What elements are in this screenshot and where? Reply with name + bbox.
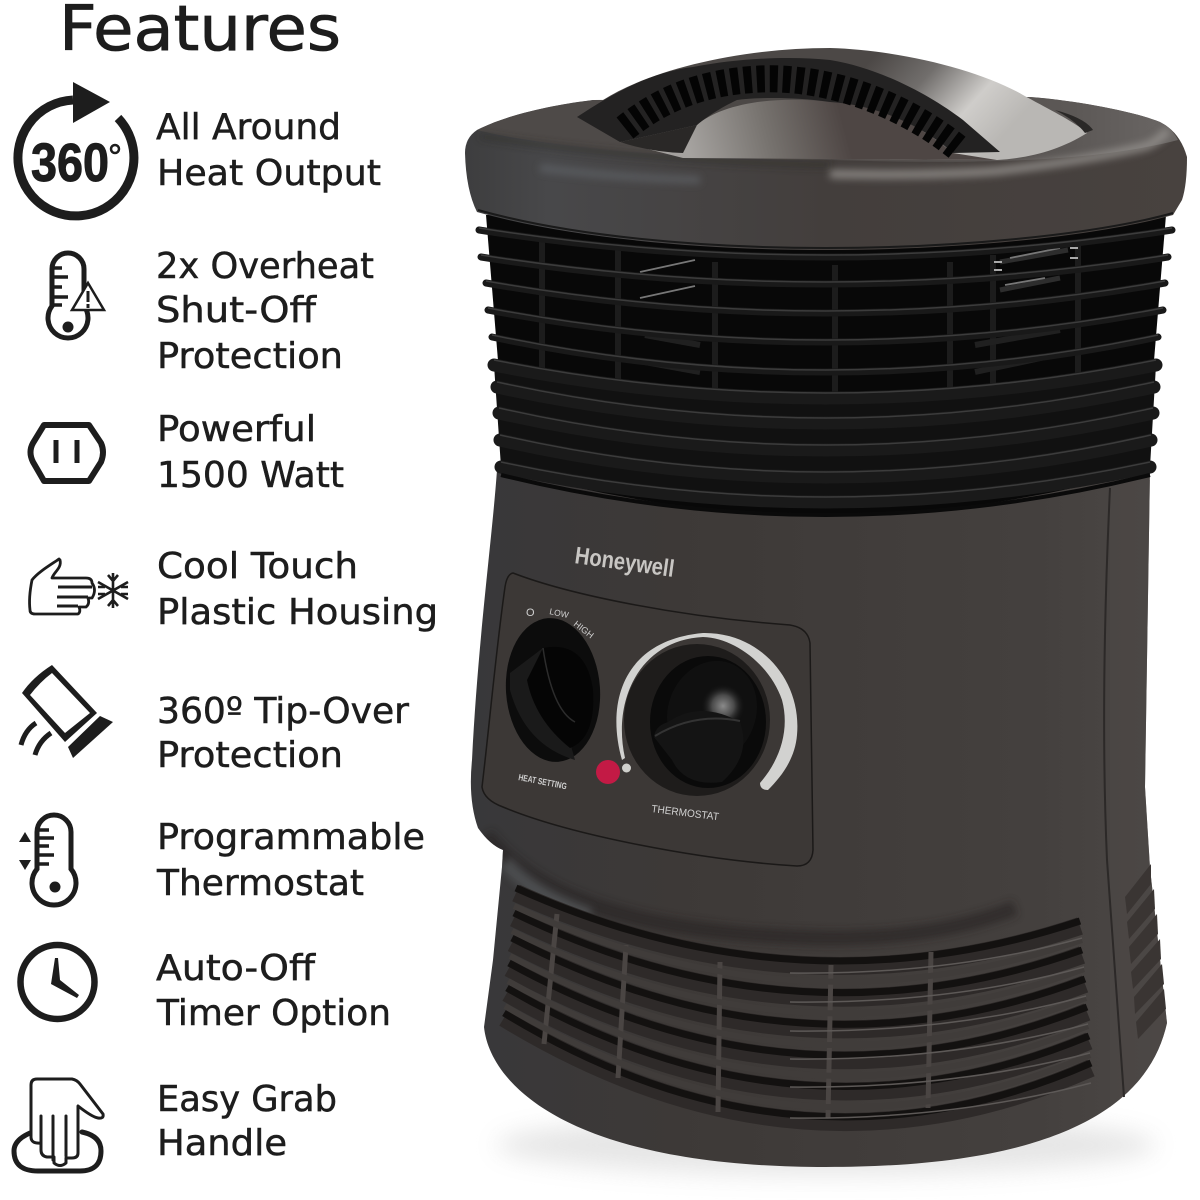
feature: overheat protection: Protection: [157, 336, 343, 377]
feature: cool touch housing: Plastic Housing: [157, 592, 438, 633]
thermostat knob: [653, 648, 771, 783]
feature: programmable thermostat: [156, 817, 425, 904]
feature: overheat protection: Shut-Off: [156, 290, 317, 331]
feature: auto-off timer: Timer Option: [156, 993, 391, 1034]
feature: tip-over protection: [157, 691, 409, 776]
icon: programmable thermometer: [19, 815, 76, 905]
thermostat scale arc: [616, 633, 797, 790]
side vents: [1125, 864, 1166, 1039]
icon: hand on grab handle: [14, 1079, 103, 1171]
feature: programmable thermostat: Thermostat: [156, 863, 364, 904]
control panel: [482, 573, 813, 866]
icon: clock: [20, 945, 94, 1019]
feature: easy grab handle: Easy Grab: [157, 1079, 337, 1120]
heat setting labels: [518, 606, 596, 791]
heat setting labels: LOW: [549, 606, 570, 620]
heat setting labels: HEAT SETTING: [518, 772, 568, 791]
brand logo: Honeywell: [573, 542, 676, 583]
body seam: [1104, 488, 1124, 1097]
feature: cool touch housing: Cool Touch: [157, 546, 358, 587]
heat setting labels: HIGH: [572, 619, 596, 640]
feature: cool touch housing: [157, 546, 438, 633]
carry handle: [577, 58, 1000, 153]
feature: 1500 watt: [157, 409, 344, 496]
heater body and base: [460, 460, 1180, 1180]
feature: easy grab handle: Handle: [157, 1123, 287, 1164]
floor shadow: [496, 1115, 1156, 1175]
feature: programmable thermostat: Programmable: [157, 817, 425, 858]
thermostat well: [624, 644, 770, 796]
feature: overheat protection: 2x Overheat: [156, 246, 374, 287]
feature: auto-off timer: Auto-Off: [156, 948, 316, 989]
heater illustration: [460, 48, 1200, 1180]
dome: [603, 48, 1093, 160]
indicator light: [596, 760, 620, 784]
heat setting labels: O: [526, 607, 535, 619]
icon: tip-over heater: [21, 665, 113, 758]
feature: 1500 watt: Powerful: [157, 409, 316, 450]
feature: auto-off timer: [156, 948, 391, 1034]
thermostat label: THERMOSTAT: [651, 803, 720, 823]
icon: thermometer with warning: [48, 253, 104, 338]
feature: all around heat output: Heat Output: [157, 153, 381, 194]
icon: cool touch hand: [30, 559, 128, 614]
feature: all around heat output: [156, 107, 381, 194]
feature: tip-over protection: Protection: [157, 735, 343, 776]
feature: 1500 watt: 1500 Watt: [157, 455, 344, 496]
heat setting knob: [501, 615, 605, 765]
top rim: [465, 97, 1187, 250]
feature: overheat protection: [156, 246, 374, 377]
feature: tip-over protection: 360º Tip-Over: [157, 691, 409, 732]
icon: electrical outlet: [30, 425, 103, 481]
icon: 360 degree arrow: [18, 82, 134, 216]
feature: all around heat output: All Around: [156, 107, 341, 148]
feature: easy grab handle: [157, 1079, 337, 1164]
icon: 360 degree arrow: 360: [31, 133, 109, 193]
base vents: [504, 888, 1091, 1122]
black grille: [479, 215, 1172, 515]
